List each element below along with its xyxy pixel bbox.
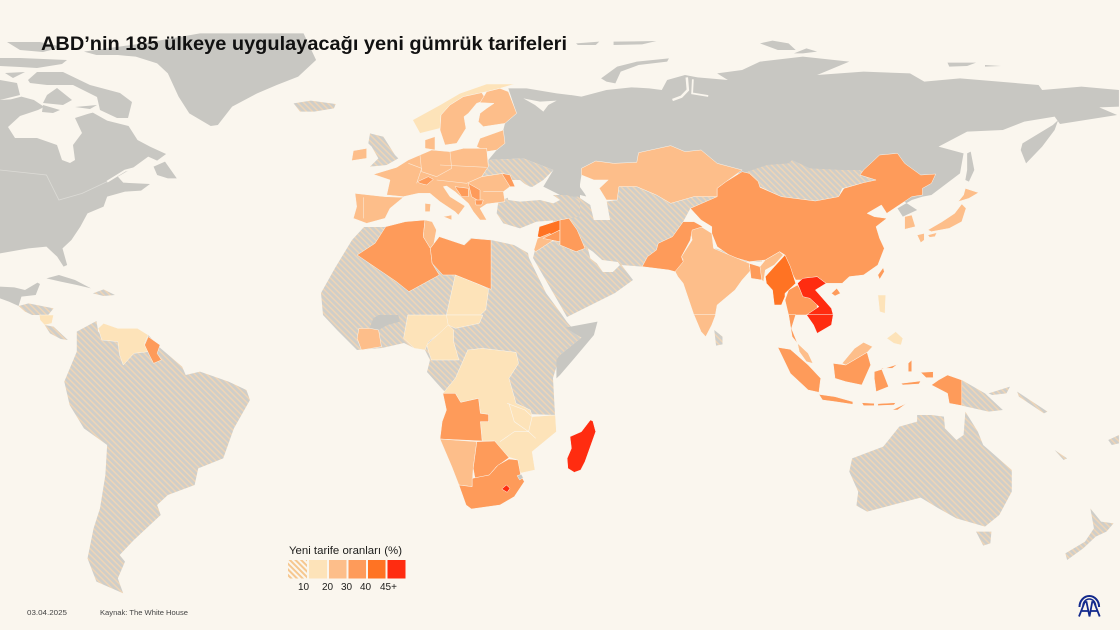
Black Sea	[507, 182, 560, 203]
Indonesia 40	[778, 347, 962, 410]
Central America, Caribbean and Iceland hatched	[19, 101, 336, 315]
Australia, New Guinea, New Zealand hatched	[714, 330, 1119, 560]
North Africa	[357, 220, 560, 315]
legend title: Yeni tarife oranları (%)	[289, 545, 402, 557]
legend labels: 10	[298, 582, 310, 593]
South and Central America hatched	[45, 321, 250, 593]
Thailand peninsula	[789, 315, 797, 343]
icon: AA logo	[1079, 596, 1100, 616]
China 40	[690, 153, 936, 283]
legend labels: 40	[360, 582, 372, 593]
Cambodia and Vietnam south 45+	[806, 315, 833, 333]
title: ABD’nin 185 ülkeye uygulayacağı yeni gümrük tarifeleri	[41, 34, 567, 55]
Africa hatched	[321, 222, 581, 415]
North America and Greenland	[0, 33, 316, 306]
India tip	[694, 315, 716, 337]
map: grey Africa on top of hatch (Somalia, Burkina Faso)	[370, 315, 597, 378]
legend	[288, 545, 406, 593]
Switzerland, Moldova, Bosnia, Serbia 40	[418, 173, 515, 205]
water bodies	[507, 180, 620, 272]
map: Europe tariff countries	[352, 84, 517, 223]
legend labels: 45+	[380, 582, 397, 593]
Myanmar	[765, 255, 796, 305]
Turkey, Ukraine, UK hatched	[368, 133, 580, 228]
Philippines 20	[887, 332, 903, 345]
map: Africa tariff countries	[39, 220, 596, 509]
legend labels: 30	[341, 582, 353, 593]
source: Kaynak: The White House	[100, 608, 188, 617]
European Russia and Belarus	[488, 88, 580, 200]
European inner borders	[363, 152, 503, 218]
Central and southern Africa	[39, 315, 556, 509]
Thailand 30-40	[785, 285, 817, 315]
Laos and Vietnam 45+	[797, 277, 833, 315]
Canadian Arctic islands	[0, 42, 132, 118]
Pakistan 40	[642, 222, 703, 272]
Hudson Bay and Saint Lawrence water	[0, 87, 134, 200]
map: countries without tariff (grey)	[0, 33, 1119, 306]
date: 03.04.2025	[27, 608, 67, 617]
legend swatches	[288, 560, 406, 578]
map: 10 percent countries (hatched)	[19, 101, 1119, 593]
Kazakhstan 30	[581, 146, 742, 203]
Caspian Sea and Persian Gulf	[581, 180, 620, 272]
legend labels: 20	[322, 582, 334, 593]
Iraq 40	[560, 218, 585, 252]
Arabia hatched	[533, 240, 633, 317]
India 30	[674, 227, 783, 315]
Malaysia 30	[797, 343, 813, 363]
European Union and neighbours 30	[352, 88, 517, 223]
map: Asia tariff countries	[560, 146, 979, 315]
Taiwan, Hainan, Korea, Japan	[831, 188, 979, 313]
Russia and Asia	[560, 41, 1119, 217]
map: Southeast Asia tariff countries	[694, 315, 962, 410]
Middle East and Central Asia hatched	[553, 160, 876, 267]
Bangladesh 40	[749, 263, 762, 280]
Norway 20	[413, 84, 515, 133]
Madagascar 45+	[567, 420, 596, 472]
legend labels	[298, 582, 397, 593]
